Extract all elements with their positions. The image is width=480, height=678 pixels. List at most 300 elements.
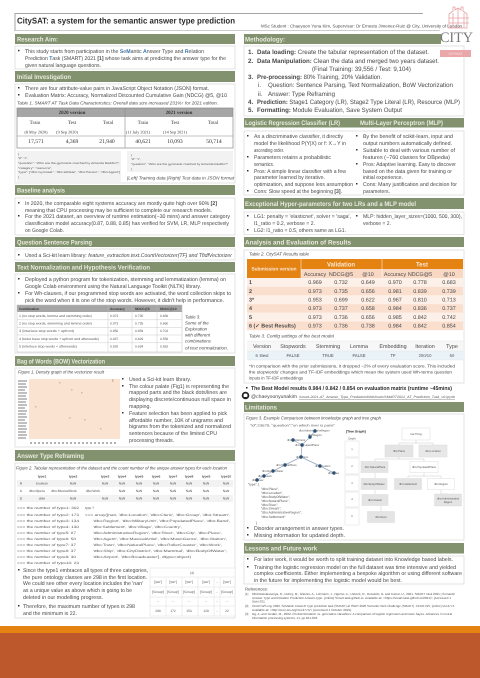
code output: type counts: >>> the number of type5: 87 bbox=[17, 531, 76, 535]
text block: methodology steps bbox=[244, 46, 464, 116]
table: dataset types: 1 bbox=[20, 489, 22, 493]
references: References: bbox=[245, 586, 268, 592]
table: dataset types: NaN bbox=[153, 482, 160, 486]
table 1: data characteristics: (9 Sep 2020) bbox=[56, 130, 78, 134]
table: results: 0.953 bbox=[308, 298, 322, 304]
text block: bow notes: displaying discrete/continuous null space in bbox=[129, 397, 231, 403]
chart: tree graph: dbo:Location bbox=[425, 450, 441, 453]
table: results: 0.656 bbox=[361, 289, 375, 295]
table 1: data characteristics: Total bbox=[103, 120, 114, 126]
table: results: 0.967 bbox=[388, 298, 402, 304]
text block: bow notes: sentences because of the limited CPU bbox=[129, 431, 217, 437]
panel: bag of words vectorization bbox=[15, 356, 235, 447]
table 1: data characteristics: 21,940 bbox=[99, 139, 115, 145]
text block: research aim: This study starts from participation in the SeMantic Answer Type and Relation bbox=[25, 49, 204, 55]
chart: knowledge graph: "type": [ bbox=[248, 482, 259, 486]
text block: initial investigation: There are four attribute-value pairs in JavaScript Object Notation (JSON) format. bbox=[25, 86, 209, 92]
heading: initial investigation: Initial Investigation bbox=[17, 74, 71, 81]
text block: baseline analysis: For the 2021 dataset, an overview of runtime estimation(~30 mins) and answer category bbox=[25, 214, 230, 220]
table 2: normalization experiments: 0.656 bbox=[160, 314, 168, 318]
heading: bag of words: Bag of Words (BOW) Vectorization bbox=[17, 358, 105, 365]
json sample: test data: { bbox=[131, 154, 132, 157]
text block: type conclusions: the pure ontology classes are 298 in the first location. bbox=[23, 575, 147, 581]
heading: initial investigation bbox=[15, 71, 235, 82]
table: results: 0.973 bbox=[308, 324, 322, 330]
text block: question sentence parsing bbox=[15, 249, 235, 260]
text block: methodology steps: Data loading: Create the tabular representation of the dataset. bbox=[257, 49, 429, 56]
text block: text normalization: For Wh-clauses, if our programmed stop words are activated, the word collection skips to bbox=[25, 291, 231, 297]
heading: answer type reframing bbox=[15, 450, 235, 461]
code output: type counts: >>> the number of type3: 134 bbox=[17, 519, 79, 523]
table: dataset types: 0 bbox=[20, 482, 22, 486]
table 2: normalization experiments: 0.950 bbox=[110, 329, 118, 333]
caption: table 3: Table 3. bbox=[185, 314, 200, 320]
table: results: 2 bbox=[249, 289, 252, 295]
table: dataset types: NaN bbox=[203, 482, 210, 486]
chart: knowledge graph: "dbo:BodyOfWater", bbox=[261, 495, 290, 499]
text block: type conclusions: and the minimum is 22. bbox=[23, 611, 77, 617]
panel: lessons and future work bbox=[244, 543, 464, 584]
chart: tree graph: owl:Thing bbox=[410, 433, 422, 436]
references: [2] bbox=[245, 604, 249, 608]
table 2: normalization experiments: 0.937 bbox=[110, 337, 118, 341]
button: CitySAT label bbox=[440, 50, 471, 57]
table: results: @10 bbox=[443, 272, 455, 278]
text block: methodology steps: (Final Training: 39,556 / Test: 9,104) bbox=[312, 66, 411, 73]
table: results: 0.736 bbox=[334, 324, 348, 330]
text block: type conclusions: as a unique value as above which is going to be bbox=[23, 588, 132, 594]
table: unique type counts: ['per'] bbox=[154, 580, 162, 584]
table: results: 5 bbox=[249, 315, 252, 321]
table: unique type counts: ... bbox=[188, 599, 190, 603]
table: dataset types: NaN bbox=[70, 496, 77, 500]
table: config settings: TF bbox=[390, 353, 396, 358]
chart: knowledge graph: "id":23679, "question":"on which river is paris" bbox=[250, 424, 336, 428]
references: Available at: <http://ceur-ws.org/Vol-2774/> [Accessed 1 October 2021]. bbox=[252, 608, 352, 612]
text block: multi-layer perceptron: Suitable to deal with various number of bbox=[363, 148, 455, 154]
text block: lessons: complex coefficients. Either implementing a bespoke algorithm or using different software bbox=[254, 571, 462, 577]
table 1: data characteristics: Train bbox=[138, 120, 149, 126]
references: Ng, A. and Jordan, M., 2002. On discriminative vs. generative classifiers: A comparison of logistic regression and naive bayes. Advances in neural bbox=[252, 612, 452, 616]
table: unique type counts: ['per'] bbox=[185, 580, 193, 584]
table: unique type counts: 153 bbox=[186, 609, 192, 613]
chart: knowledge graph: dbo:Settlement bbox=[287, 439, 305, 442]
code output: type array: >>> array([nan, 'dbo:Location', 'dbo:Cleric', 'dbo:Group', 'dbo:Stream', bbox=[85, 513, 230, 517]
text block: lessons: in the future for implementing the logistic model would be best. bbox=[254, 578, 402, 584]
table: results: 0.736 bbox=[334, 315, 348, 321]
table: results: 0.735 bbox=[334, 289, 348, 295]
table: dataset types: 2 bbox=[20, 496, 22, 500]
footer band bbox=[0, 626, 480, 678]
references: [3] bbox=[245, 612, 249, 616]
table 2: normalization experiments: 0.928 bbox=[110, 344, 118, 348]
json sample: test data: "question": "Who are the gymnasts coached by Amanda Reddin?" bbox=[131, 163, 228, 166]
text block: question sentence parsing: Used a Sci-kit learn library: feature_extraction.text.CountVectorizer(TF) and TfidfVectorizer bbox=[25, 253, 232, 259]
heading: hyper-parameters bbox=[244, 198, 464, 209]
table: dataset types: NaN bbox=[186, 489, 193, 493]
table 2: normalization experiments: 0.629 bbox=[135, 337, 143, 341]
table 2: normalization experiments: 0.973 bbox=[110, 322, 118, 326]
panel: research aim bbox=[15, 34, 235, 69]
table 1: data characteristics: 2021 version bbox=[166, 110, 193, 116]
table: unique type counts: (4) bbox=[190, 571, 194, 575]
table 1: data characteristics: 10,093 bbox=[167, 139, 183, 145]
text block: hyper-parameters: l1_ratio = 0.2, verbose = 2. bbox=[254, 221, 315, 227]
code output: type counts: >>> the number of type2: 173 bbox=[17, 513, 79, 517]
table 1: data characteristics: 2020 version bbox=[59, 110, 86, 116]
table: dataset types: NaN bbox=[223, 496, 230, 500]
table: dataset types: NaN bbox=[136, 489, 143, 493]
table: results: Validation bbox=[327, 262, 355, 268]
panel: hyper-parameters bbox=[244, 198, 464, 234]
text block: logistic regression: As a discriminative classifier, it directly bbox=[254, 134, 343, 140]
text block: type conclusions: deleted in our modelling progress. bbox=[23, 595, 103, 601]
chart: tree graph: 3 bbox=[351, 482, 353, 485]
table: unique type counts: ['per'] bbox=[169, 580, 177, 584]
table: config settings: 50 bbox=[450, 353, 455, 358]
code output: type array: 'dbo:Region', 'dbo:MilitaryUnit', 'dbo:PopulatedPlace', 'dbo:Band', bbox=[93, 519, 230, 523]
code output: type array: type ? bbox=[85, 506, 94, 510]
text block: methodology steps: 3. bbox=[248, 74, 254, 81]
table: config settings: Stopwords bbox=[280, 344, 306, 350]
title bar bbox=[15, 14, 440, 31]
table: dataset types: NaN bbox=[186, 482, 193, 486]
text block: text normalization: Google Colab environment using the Natural Language Toolkit (NLTK) library. bbox=[25, 284, 201, 290]
table: config settings: 200/10 bbox=[419, 353, 432, 358]
text block: research aim: Prediction Task (SMART) 2021 [1] whose task aims at predicting the answer type for the bbox=[25, 56, 226, 62]
table: results: 0.778 bbox=[413, 280, 427, 286]
table: results: 0.973 bbox=[308, 289, 322, 295]
table: results: NDCG@5 bbox=[329, 272, 353, 278]
table: unique type counts: ['Group'] bbox=[183, 590, 195, 594]
table: results: 0.984 bbox=[388, 324, 402, 330]
table: dataset types: NaN bbox=[70, 482, 77, 486]
caption: figure 3: Figure 3. Example Comparison between knowledge graph and tree graph bbox=[246, 416, 382, 420]
heading: methodology bbox=[244, 34, 441, 44]
text block: comparison note: *In comparison with the prior submissions, it dropped ~2% of every evaluation score. This included bbox=[249, 364, 456, 368]
table: dataset types: type7 bbox=[169, 474, 177, 478]
table: dataset types: NaN bbox=[223, 482, 230, 486]
chart: tree graph: dbo:BodyOfWater bbox=[363, 483, 385, 486]
text block: logistic regression: ascending order. bbox=[254, 148, 284, 154]
table: dataset types: dbo:Opera bbox=[29, 489, 45, 493]
panel: answer type reframing bbox=[15, 450, 235, 618]
text block: initial investigation: Table 1. SMART AT Task Data Characteristics: Overall data size increased 231%↑ for 2021 edition. bbox=[17, 100, 218, 106]
text block: multi-layer perceptron: features (~760 classes for DBpedia) bbox=[363, 155, 450, 161]
table: results: 0.737 bbox=[442, 306, 456, 312]
table 1: data characteristics: (11 July 2021) bbox=[126, 130, 151, 134]
text block: methodology steps: Question: Sentence Parsing, Text Normalization, BoW Vectorization bbox=[268, 82, 453, 89]
code output: type array: 'dbo:Ship', 'dbo:CityDistrict', 'dbo:Mammal', 'dbo:BodyOfWater', bbox=[93, 549, 227, 553]
chart: knowledge graph: "dbo:Location", bbox=[261, 491, 283, 495]
json sample: training data: "type": ["dbo:Gymnast", "dbo:Athlete", "dbo:Person", "dbo:Agent"] bbox=[18, 171, 120, 174]
code output: type array: 'dbo:Town', 'dbo:NaturalPlace', 'dbo:RollerCoaster', 'dbo:Work', bbox=[93, 543, 222, 547]
table: config settings bbox=[247, 341, 463, 360]
table 2: normalization experiments: 0.735 bbox=[135, 322, 143, 326]
table: dataset types: NaN bbox=[102, 482, 109, 486]
logo: City university bbox=[440, 7, 474, 46]
text block: comparison note bbox=[249, 364, 456, 380]
table: unique type counts: ['Group'] bbox=[167, 590, 179, 594]
panel box: analysis bbox=[244, 250, 464, 383]
code output: type counts: >>> the number of type6: 58 bbox=[17, 537, 76, 541]
text block: text normalization: Deployed a python program for tokenization, stemming and lemmatization (lemma) on bbox=[25, 277, 226, 283]
table: results: 6 (✓ Best Results) bbox=[249, 324, 296, 330]
table: results: 0.699 bbox=[334, 298, 348, 304]
chart: tree graph: 4 bbox=[351, 498, 353, 501]
text block: methodology steps: i. bbox=[258, 82, 261, 89]
code output: type counts: >>> the number of type7: 37 bbox=[17, 543, 76, 547]
table 1: data characteristics: 40,621 bbox=[135, 139, 151, 145]
table 2: normalization experiments: 5 (interlace stop words + afterwards) bbox=[19, 344, 77, 348]
table 2: normalization experiments: 0.660 bbox=[160, 322, 168, 326]
title bar: CitySAT: a system for the semantic answer type prediction bbox=[17, 16, 235, 26]
table: config settings: TRUE bbox=[322, 353, 334, 358]
references: October 2021]. bbox=[252, 600, 265, 604]
table: config settings: Embedding bbox=[379, 344, 407, 350]
table: unique type counts bbox=[150, 568, 235, 616]
text block: multi-layer perceptron: based on the data given for training or bbox=[363, 169, 452, 175]
chart: tree graph bbox=[345, 428, 462, 525]
table: dataset types: boolean bbox=[36, 482, 48, 486]
table: unique type counts: .. bbox=[216, 599, 218, 603]
table: results: 3* bbox=[249, 298, 255, 304]
chart: knowledge graph: "dbo:Place", bbox=[261, 487, 279, 491]
table: results: Accuracy bbox=[304, 272, 326, 278]
table: unique type counts: ... bbox=[172, 599, 174, 603]
caption: figure 2: Figure 2. Tabular representation of the dataset and the count number of the unique answer types for each location bbox=[16, 466, 228, 470]
table: dataset types: type2 bbox=[69, 474, 77, 478]
table: results bbox=[247, 259, 463, 330]
chart: knowledge graph: } bbox=[256, 521, 258, 525]
text block: baseline analysis: meaning that CPU processing may be sufficient to complete our research models. bbox=[25, 208, 212, 214]
caption: figure 1: Figure 1. Density graph of the vectorizer result bbox=[18, 370, 105, 374]
table: dataset types: NaN bbox=[203, 489, 210, 493]
table: dataset types: NaN bbox=[170, 496, 177, 500]
text block: logistic regression: Cons: Slow speed at the beginning [3]. bbox=[254, 189, 342, 195]
references: Answer Type and Relation Prediction Answer-type. [online] Smart-task.github.io. Available at: <https://smart-task.github.io/2021/> [Accessed 1 bbox=[252, 596, 451, 600]
table: results: Test bbox=[416, 262, 429, 268]
text block: baseline analysis: In 2020, the comparable eight systems accuracy are mostly quite high over 90% [2] bbox=[25, 201, 217, 207]
caption: table 3: Exploration bbox=[185, 326, 208, 332]
table 1: data characteristics: Total bbox=[208, 120, 219, 126]
text block: lessons: Training the logistic regression model on the full dataset was time intensive and yielded bbox=[254, 565, 456, 571]
text block: limitations list bbox=[247, 526, 345, 539]
table: results: 0.739 bbox=[442, 289, 456, 295]
code output: type counts: >>> the number of type4: 130 bbox=[17, 525, 79, 529]
chart: knowledge graph: dbo:Area bbox=[328, 472, 339, 475]
table 1: data characteristics: 4,369 bbox=[66, 139, 78, 145]
text block: bow notes: Used a Sci-kit learn library. bbox=[129, 377, 191, 383]
text block: methodology steps: 5. bbox=[248, 107, 254, 114]
chart: knowledge graph: dbo:Location bbox=[315, 465, 331, 468]
table: unique type counts: .. bbox=[216, 590, 218, 594]
chart: tree graph: dbo:Region bbox=[434, 483, 448, 486]
table 2: normalization experiments: 4 (twice base stop words + upfront and afterwards) bbox=[19, 337, 99, 341]
json sample: test data: } bbox=[131, 168, 132, 171]
table: dataset types: NaN bbox=[119, 482, 126, 486]
text block: bow notes: bigrams from the tokenized and normalized bbox=[129, 424, 231, 430]
chart: tree graph: Depth bbox=[348, 438, 356, 440]
text block: comparison note: the stopwords' changes and TF-IDF embeddings which mean the system used Wh-terms question bbox=[249, 370, 453, 374]
table: dataset types: date bbox=[39, 496, 45, 500]
table: unique type counts: 129 bbox=[203, 609, 209, 613]
panel: limitations bbox=[244, 402, 464, 540]
chart: tree graph: dbo:Settlement bbox=[399, 483, 417, 486]
table: config settings: 6 :Best bbox=[255, 353, 269, 358]
panel: text normalization bbox=[15, 262, 235, 353]
caption: table 3: Some of the bbox=[185, 320, 209, 326]
table: results: 0.738 bbox=[361, 324, 375, 330]
chart: knowledge graph: dbo:BodyOfWater bbox=[262, 470, 283, 473]
chart: knowledge graph: "dbo:Settlement" bbox=[261, 515, 286, 519]
table 2: normalization experiments: 1 (no stop words, lemma and stemming order) bbox=[19, 314, 92, 318]
text block: type conclusions: Therefore, the maximum number of types is 298 bbox=[23, 604, 135, 610]
chart: tree graph: Region bbox=[444, 501, 453, 504]
table 1: data characteristics: (8 May 2020) bbox=[24, 130, 48, 134]
table 1: data characteristics: 17,571 bbox=[28, 139, 44, 145]
json sample: training data: { bbox=[18, 153, 19, 156]
table: dataset types: type6 bbox=[152, 474, 160, 478]
references: CEUR-WS.org. 2020. SeMantic AnsweR Type prediction task (SMART) at ISWC 2020 Semantic Web Challenge (SMART). CEUR-WS, [online] Vol-2774. bbox=[252, 604, 455, 608]
table: results: 4 bbox=[249, 306, 252, 312]
table: results: 0.842 bbox=[413, 315, 427, 321]
table 2: normalization experiments: 0.659 bbox=[135, 329, 143, 333]
heading: lessons: Lessons and Future work bbox=[245, 546, 317, 553]
table: dataset types: NaN bbox=[119, 496, 126, 500]
chart: tree graph: 1 bbox=[351, 448, 353, 451]
table 1: data characteristics: Train bbox=[30, 120, 41, 126]
table: results: 0.656 bbox=[361, 315, 375, 321]
heading: question sentence parsing bbox=[15, 237, 235, 247]
chart: knowledge graph: dbo:Place bbox=[296, 456, 308, 459]
text block: multi-layer perceptron: initial experience. bbox=[363, 175, 403, 181]
caption: json format: [Left] Training data [Right] Test data in JSON format bbox=[126, 176, 235, 180]
code output: type counts: >>> the number of type9: 30 bbox=[17, 555, 76, 559]
code output: type counts bbox=[17, 506, 79, 565]
table: dataset types: NaN bbox=[136, 482, 143, 486]
references: information processing systems, 14, pp.841-848. bbox=[252, 616, 318, 620]
text block: initial investigation bbox=[15, 84, 235, 183]
table 2: normalization experiments: NDCG@10 bbox=[160, 307, 177, 311]
text block: logistic regression: Pros: A simple linear classifier with a few bbox=[254, 169, 346, 175]
chart: density heatmap bbox=[18, 379, 120, 443]
heading: bag of words bbox=[15, 356, 235, 366]
table: dataset types: type4 bbox=[118, 474, 126, 478]
table: results: Submission version bbox=[252, 266, 296, 272]
text block: logistic regression: model the likelihood P(Y|X) or f: X→Y in bbox=[254, 141, 346, 147]
caption: results table: Table 2. CitySAT Results table bbox=[249, 252, 310, 256]
table 1: data characteristics: Test bbox=[171, 120, 180, 126]
text block: methodology steps: Answer: Type Reframing bbox=[268, 91, 335, 98]
text block: initial investigation: Evaluation Matrix: Accuracy, Normalized Discounted Cumulative Gain (NDCG) @5, @10 bbox=[25, 93, 227, 99]
table: results: 0.984 bbox=[388, 306, 402, 312]
table: results: 0.839 bbox=[413, 289, 427, 295]
panel: question sentence parsing bbox=[15, 237, 235, 260]
heading: classifiers: Multi-Layer Perceptron (MLP) bbox=[360, 120, 443, 127]
chart: knowledge graph: dbo:AdministrativeRegion bbox=[299, 430, 330, 432]
text block: baseline analysis bbox=[15, 198, 235, 235]
heading: baseline analysis: Baseline analysis bbox=[17, 187, 65, 194]
text block: type conclusions bbox=[18, 568, 148, 617]
table: unique type counts: ... bbox=[205, 599, 207, 603]
text block: methodology steps: 2. bbox=[248, 58, 254, 65]
table: unique type counts: ... bbox=[157, 599, 159, 603]
table: results: 0.985 bbox=[388, 315, 402, 321]
table 2: normalization experiments: Accuracy bbox=[110, 307, 125, 311]
text block: multi-layer perceptron: parameters. bbox=[363, 189, 390, 195]
table: dataset types: type9 bbox=[202, 474, 210, 478]
text block: bow notes: processing threads. bbox=[129, 438, 174, 444]
text block: hyper-parameters: LG2: l1_ratio = 0.5, others same as LG1. bbox=[254, 228, 346, 234]
text block: type conclusions: Since the type1 embraces all types of three categories, bbox=[23, 568, 148, 574]
chart: knowledge graph: dbo:NaturalPlace bbox=[276, 464, 297, 467]
table: dataset types: NaN bbox=[153, 489, 160, 493]
text block: multi-layer perceptron: Cons: Many justification and decision for bbox=[363, 182, 457, 188]
heading: answer type reframing: Answer Type Reframing bbox=[17, 453, 84, 460]
table: unique type counts: 172 bbox=[170, 609, 176, 613]
heading: lessons bbox=[244, 543, 464, 554]
table 1: data characteristics: (14 Sep 2021) bbox=[163, 130, 187, 134]
chart: tree graph: [Tree Graph] bbox=[346, 430, 366, 434]
code output: type counts: >>> the number of type10: 23 bbox=[17, 561, 79, 565]
heading: baseline analysis bbox=[15, 185, 235, 195]
table: results: @10 bbox=[362, 272, 374, 278]
table: results: Accuracy bbox=[384, 272, 406, 278]
caption: table 3: of text normalization. bbox=[185, 346, 228, 350]
text block: methodology steps: 4. bbox=[248, 99, 254, 106]
chart: tree graph: dbo:NaturalPlace bbox=[365, 466, 386, 469]
text block: bow notes: affordable number, 10K of unigrams and bbox=[129, 418, 223, 424]
table 1: data characteristics: Test bbox=[68, 120, 77, 126]
table: results: 0.854 bbox=[442, 324, 456, 330]
json sample: training data: "id": "1", bbox=[18, 157, 28, 160]
json sample: training data: "category": "resource", bbox=[18, 167, 52, 170]
table: results: 0.842 bbox=[413, 324, 427, 330]
text block: comparison note: inputs in TF-IDF embeddings bbox=[249, 376, 303, 380]
code output: type array: 'dbo:AdministrativeRegion', 'dbo:River', 'dbo:City', 'dbo:Place', bbox=[93, 531, 222, 535]
text block: methodology steps: ii. bbox=[258, 91, 263, 98]
table 2: normalization experiments: Combination bbox=[19, 307, 39, 311]
table: config settings: Iteration bbox=[415, 344, 435, 350]
table: dataset types: NaN bbox=[153, 496, 160, 500]
table: dataset types: NaN bbox=[223, 489, 230, 493]
table 2: normalization experiments bbox=[17, 305, 182, 352]
text block: bow notes bbox=[122, 377, 231, 444]
table: config settings: Stemming bbox=[316, 344, 340, 350]
code output: type array bbox=[85, 506, 230, 559]
table: dataset types: type3 bbox=[101, 474, 109, 478]
text block: bow notes: mapping. bbox=[129, 404, 151, 410]
table 1: data characteristics: 50,714 bbox=[206, 139, 222, 145]
table 2: normalization experiments: 0.562 bbox=[160, 344, 168, 348]
table: dataset types: dbo:MusicalWork bbox=[51, 489, 77, 493]
table: config settings: Version bbox=[253, 344, 271, 350]
caption: table 3 bbox=[185, 314, 228, 350]
chart: tree graph: dbo:Administrative bbox=[437, 498, 460, 500]
table 2: normalization experiments: 0.702 bbox=[160, 329, 168, 333]
author line: MSc Student : Chaeyoon Yuna Kim, Supervisor: Dr Ernesto Jimenez-Ruiz @ City, University of London bbox=[261, 24, 463, 28]
panel: model descriptions bbox=[244, 118, 464, 195]
table: dataset types: type8 bbox=[185, 474, 193, 478]
json sample: training data: "question": "Who are the gymnasts coached by Amanda Reddin?", bbox=[18, 162, 120, 165]
heading: hyper-parameters: Exceptional Hyper-parameters for two LRs and a MLP model bbox=[245, 201, 416, 208]
table: results: NDCG@5 bbox=[408, 272, 432, 278]
heading: limitations: Limitations bbox=[245, 404, 277, 411]
table: dataset types: NaN bbox=[170, 482, 177, 486]
text block: methodology steps: 1. bbox=[248, 49, 254, 56]
chart: knowledge graph: dbo:Stream bbox=[258, 475, 273, 478]
